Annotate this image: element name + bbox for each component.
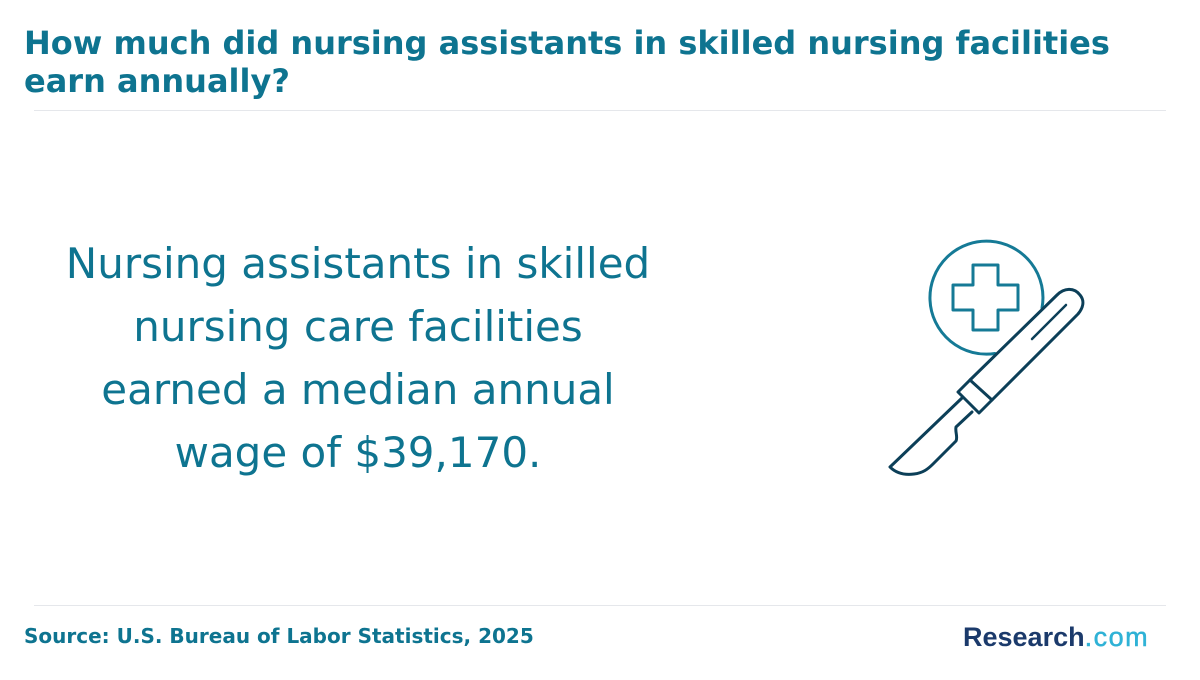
main statement: nursing care facilities — [133, 302, 583, 351]
title — [24, 24, 1110, 100]
icon: medical cross in circle — [930, 241, 1043, 354]
title: earn annually? — [24, 62, 290, 100]
main statement — [66, 239, 650, 477]
source note: Source: U.S. Bureau of Labor Statistics, 2025 — [24, 624, 534, 648]
main statement: Nursing assistants in skilled — [66, 239, 650, 288]
title: How much did nursing assistants in skilled nursing facilities — [24, 24, 1110, 62]
logo: Research.com: Research.com — [963, 622, 1149, 652]
icon: scalpel and medical cross — [888, 240, 1084, 476]
main statement: earned a median annual — [101, 365, 615, 414]
main statement: wage of $39,170. — [175, 428, 541, 477]
icon: scalpel — [890, 289, 1083, 474]
